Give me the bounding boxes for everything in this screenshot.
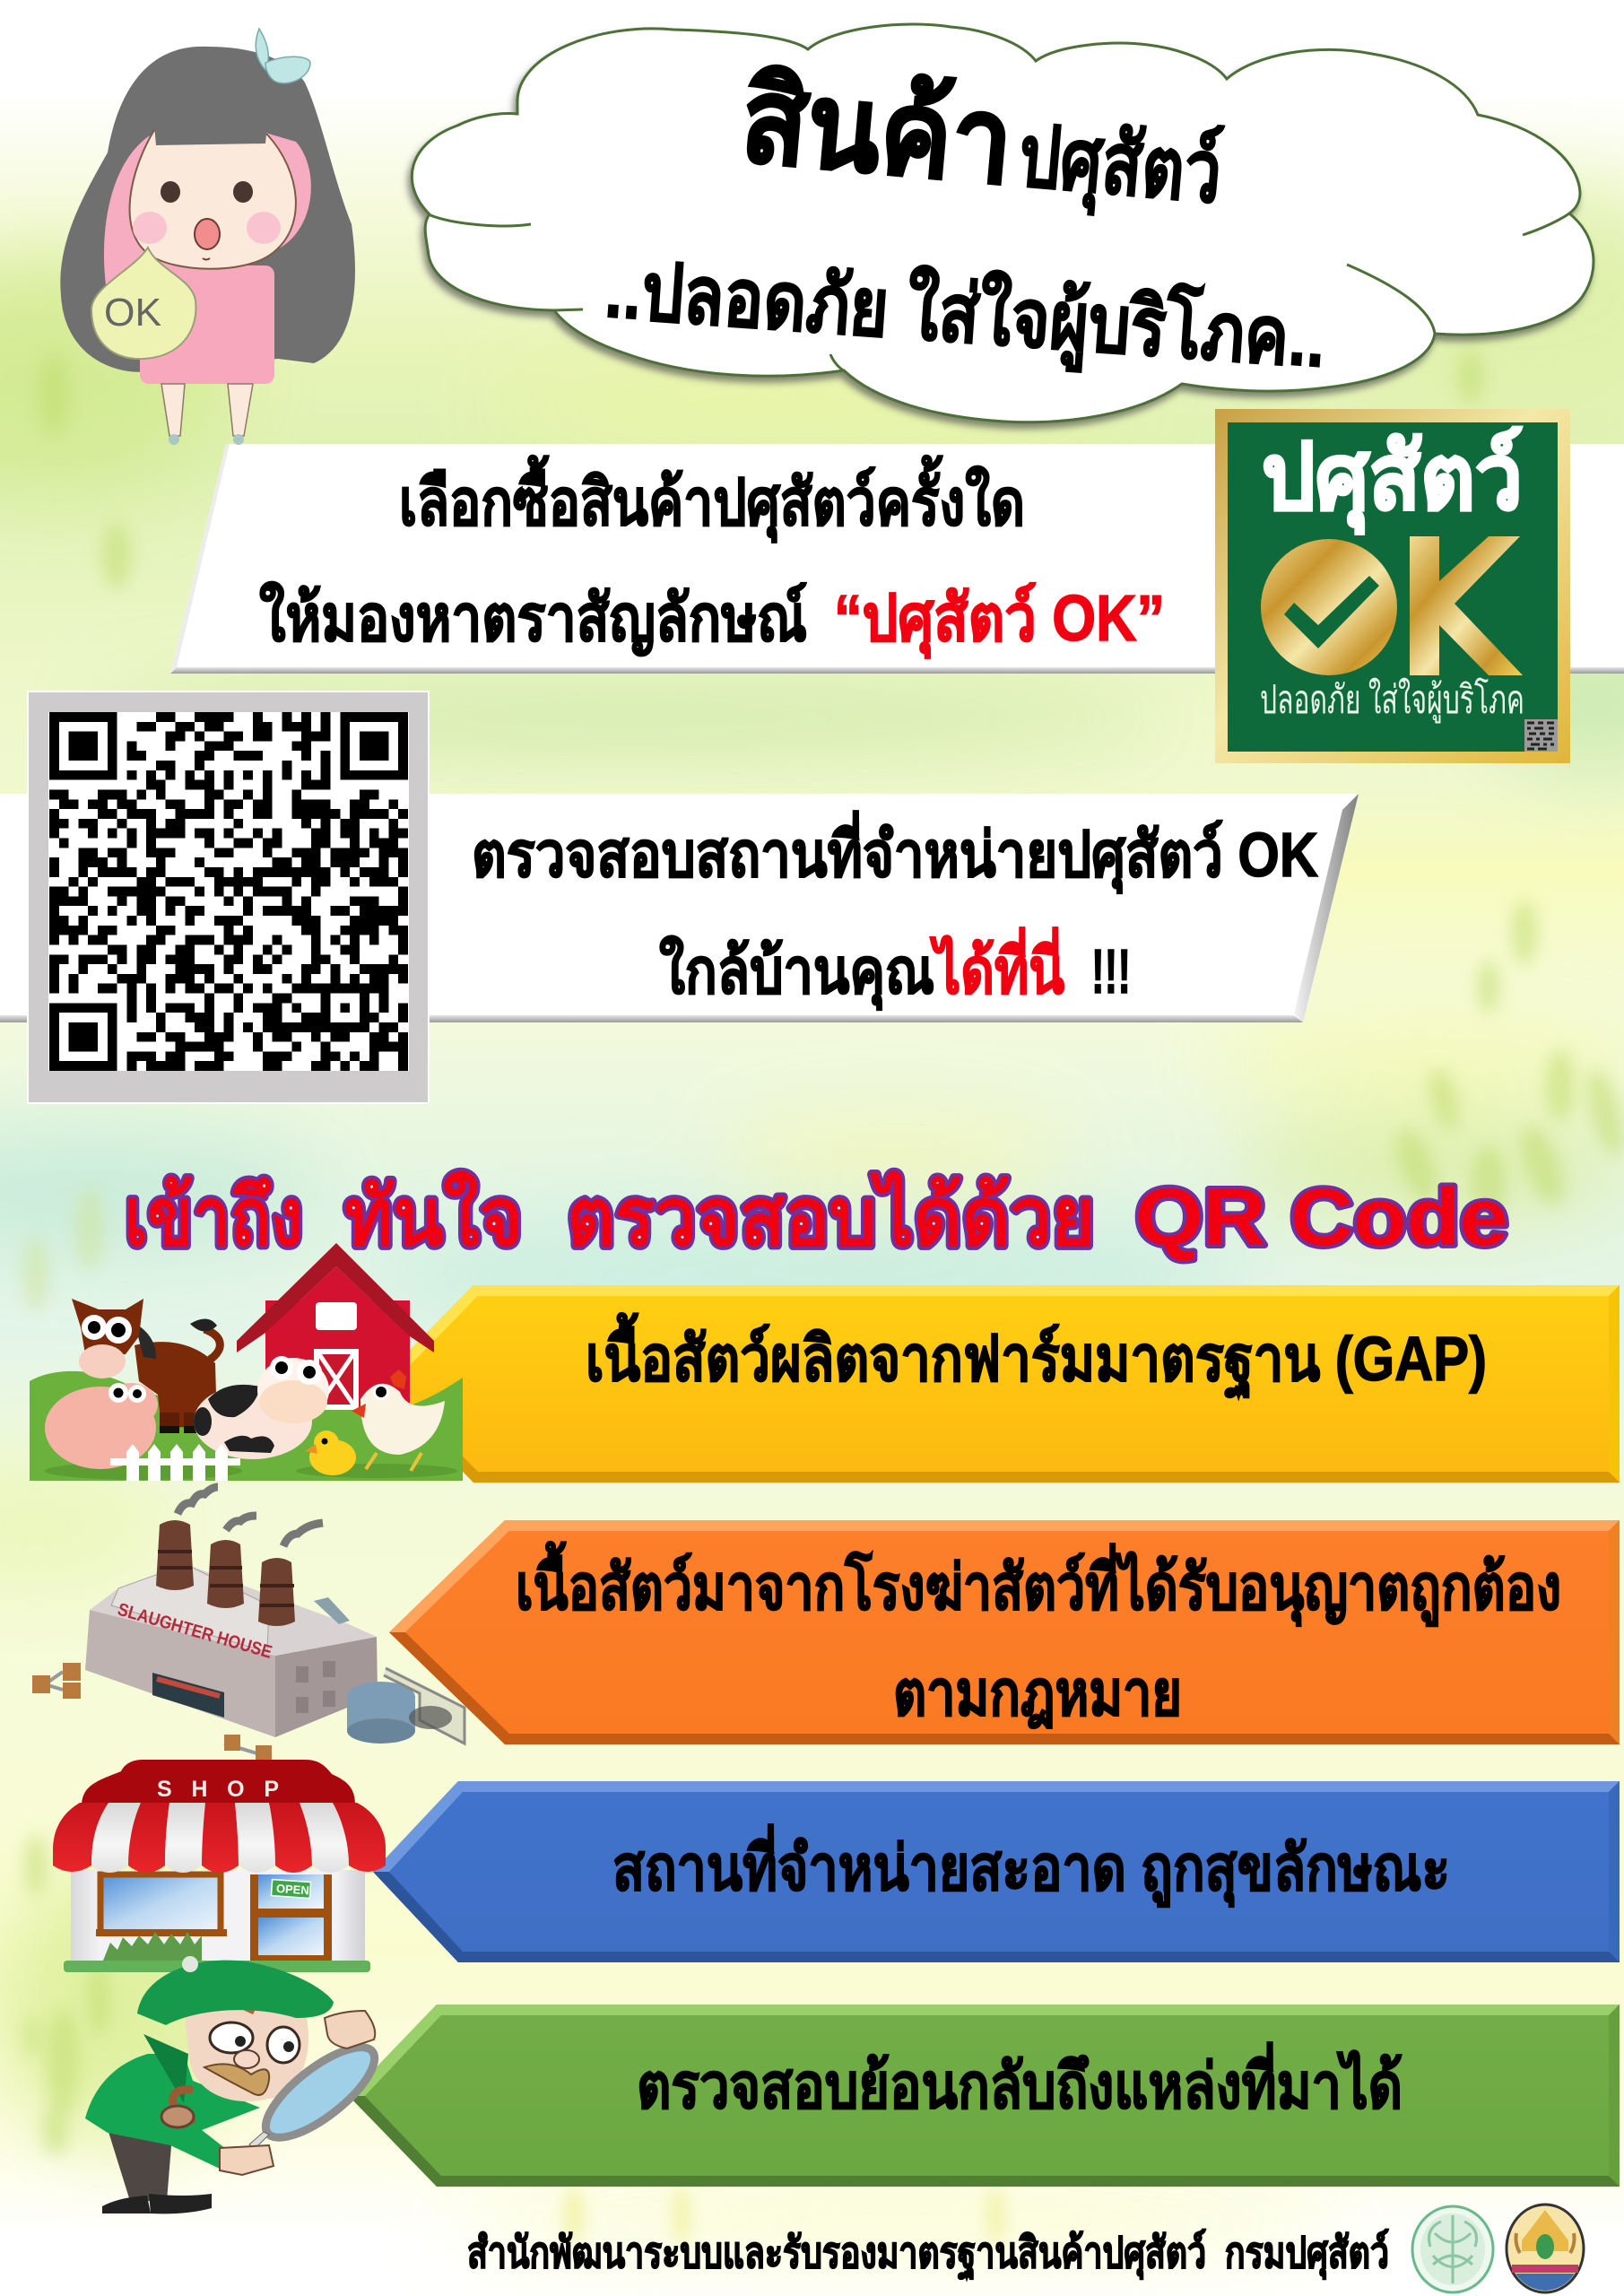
illustration: slaughter house [32, 1487, 465, 1760]
arrow: blue shop [373, 1781, 1620, 1962]
title: product name: สินค้า [737, 53, 1018, 208]
pig [45, 1387, 156, 1469]
headline [125, 1171, 1508, 1263]
duck [309, 1439, 356, 1475]
white band: check nearby stores [0, 794, 1359, 1022]
illustration: shop: S H O P [157, 1777, 279, 1802]
text block: choose products: ให้มองหาตราสัญลักษณ์ [259, 580, 807, 657]
arrow: green traceability: ตรวจสอบย้อนกลับถึงแหล่งที่มาได้ [637, 2041, 1403, 2121]
title: livestock word: ปศุสัตว์ [1015, 108, 1226, 227]
cow [194, 1384, 312, 1459]
character: girl holding OK bubble [60, 29, 355, 445]
headline: เข้าถึง [125, 1173, 303, 1263]
arrow: orange slaughterhouse: ตามกฎหมาย [893, 1658, 1182, 1729]
emblem: green seal [1412, 2206, 1493, 2292]
text block: choose products [259, 455, 1165, 659]
cloud with title [412, 24, 1594, 422]
illustration: detective with magnifier [85, 1956, 387, 2213]
character: girl holding OK bubble: OK [104, 291, 161, 335]
red emphasis: ได้ที่นี่ [929, 926, 1064, 1006]
red brand name: “ปศุสัตว์ OK” [834, 582, 1165, 659]
illustration: shop [53, 1760, 386, 1972]
arrow: yellow farm [377, 1285, 1620, 1483]
text block: check stores: !!! [1091, 936, 1131, 1006]
text block: check stores: ตรวจสอบสถานที่จำหน่ายปศุสัตว์ OK [472, 810, 1318, 894]
headline: ตรวจสอบได้ด้วย [567, 1171, 1095, 1263]
arrow: green traceability [349, 2005, 1620, 2187]
slogan: ..ปลอดภัย ใส่ใจผู้บริโภค.. [602, 242, 1329, 389]
headline: ทันใจ [344, 1171, 523, 1263]
text block: check stores [472, 810, 1318, 1011]
horse [135, 1342, 217, 1428]
logo: OK badge: ปศุสัตว์ [1262, 426, 1523, 535]
chicken [360, 1384, 445, 1455]
illustration: farm animals and barn [30, 1243, 463, 1481]
illustration: slaughter house: SLAUGHTER HOUSE [116, 1600, 274, 1663]
arrow: orange slaughterhouse [389, 1520, 1620, 1744]
headline: QR Code [1135, 1173, 1508, 1263]
illustration: shop: OPEN [275, 1882, 309, 1897]
footer text: สำนักพัฒนาระบบและรับรองมาตรฐานสินค้าปศุสัตว์ กรมปศุสัตว์ [467, 2229, 1389, 2281]
white band: choose products [170, 444, 1624, 674]
arrow: blue shop: สถานที่จำหน่ายสะอาด ถูกสุขลักษณะ [612, 1823, 1450, 1908]
emblem: department seal [1507, 2205, 1584, 2292]
arrow: yellow farm: เนื้อสัตว์ผลิตจากฟาร์มมาตรฐาน (GAP) [586, 1312, 1487, 1399]
QR code panel [28, 691, 429, 1103]
fence [110, 1458, 240, 1465]
logo: OK badge [1215, 409, 1570, 763]
text block: choose products: เลือกซื้อสินค้าปศุสัตว์ครั้งใด [399, 455, 1025, 544]
text block: check stores: ใกล้บ้านคุณ [659, 935, 934, 1011]
